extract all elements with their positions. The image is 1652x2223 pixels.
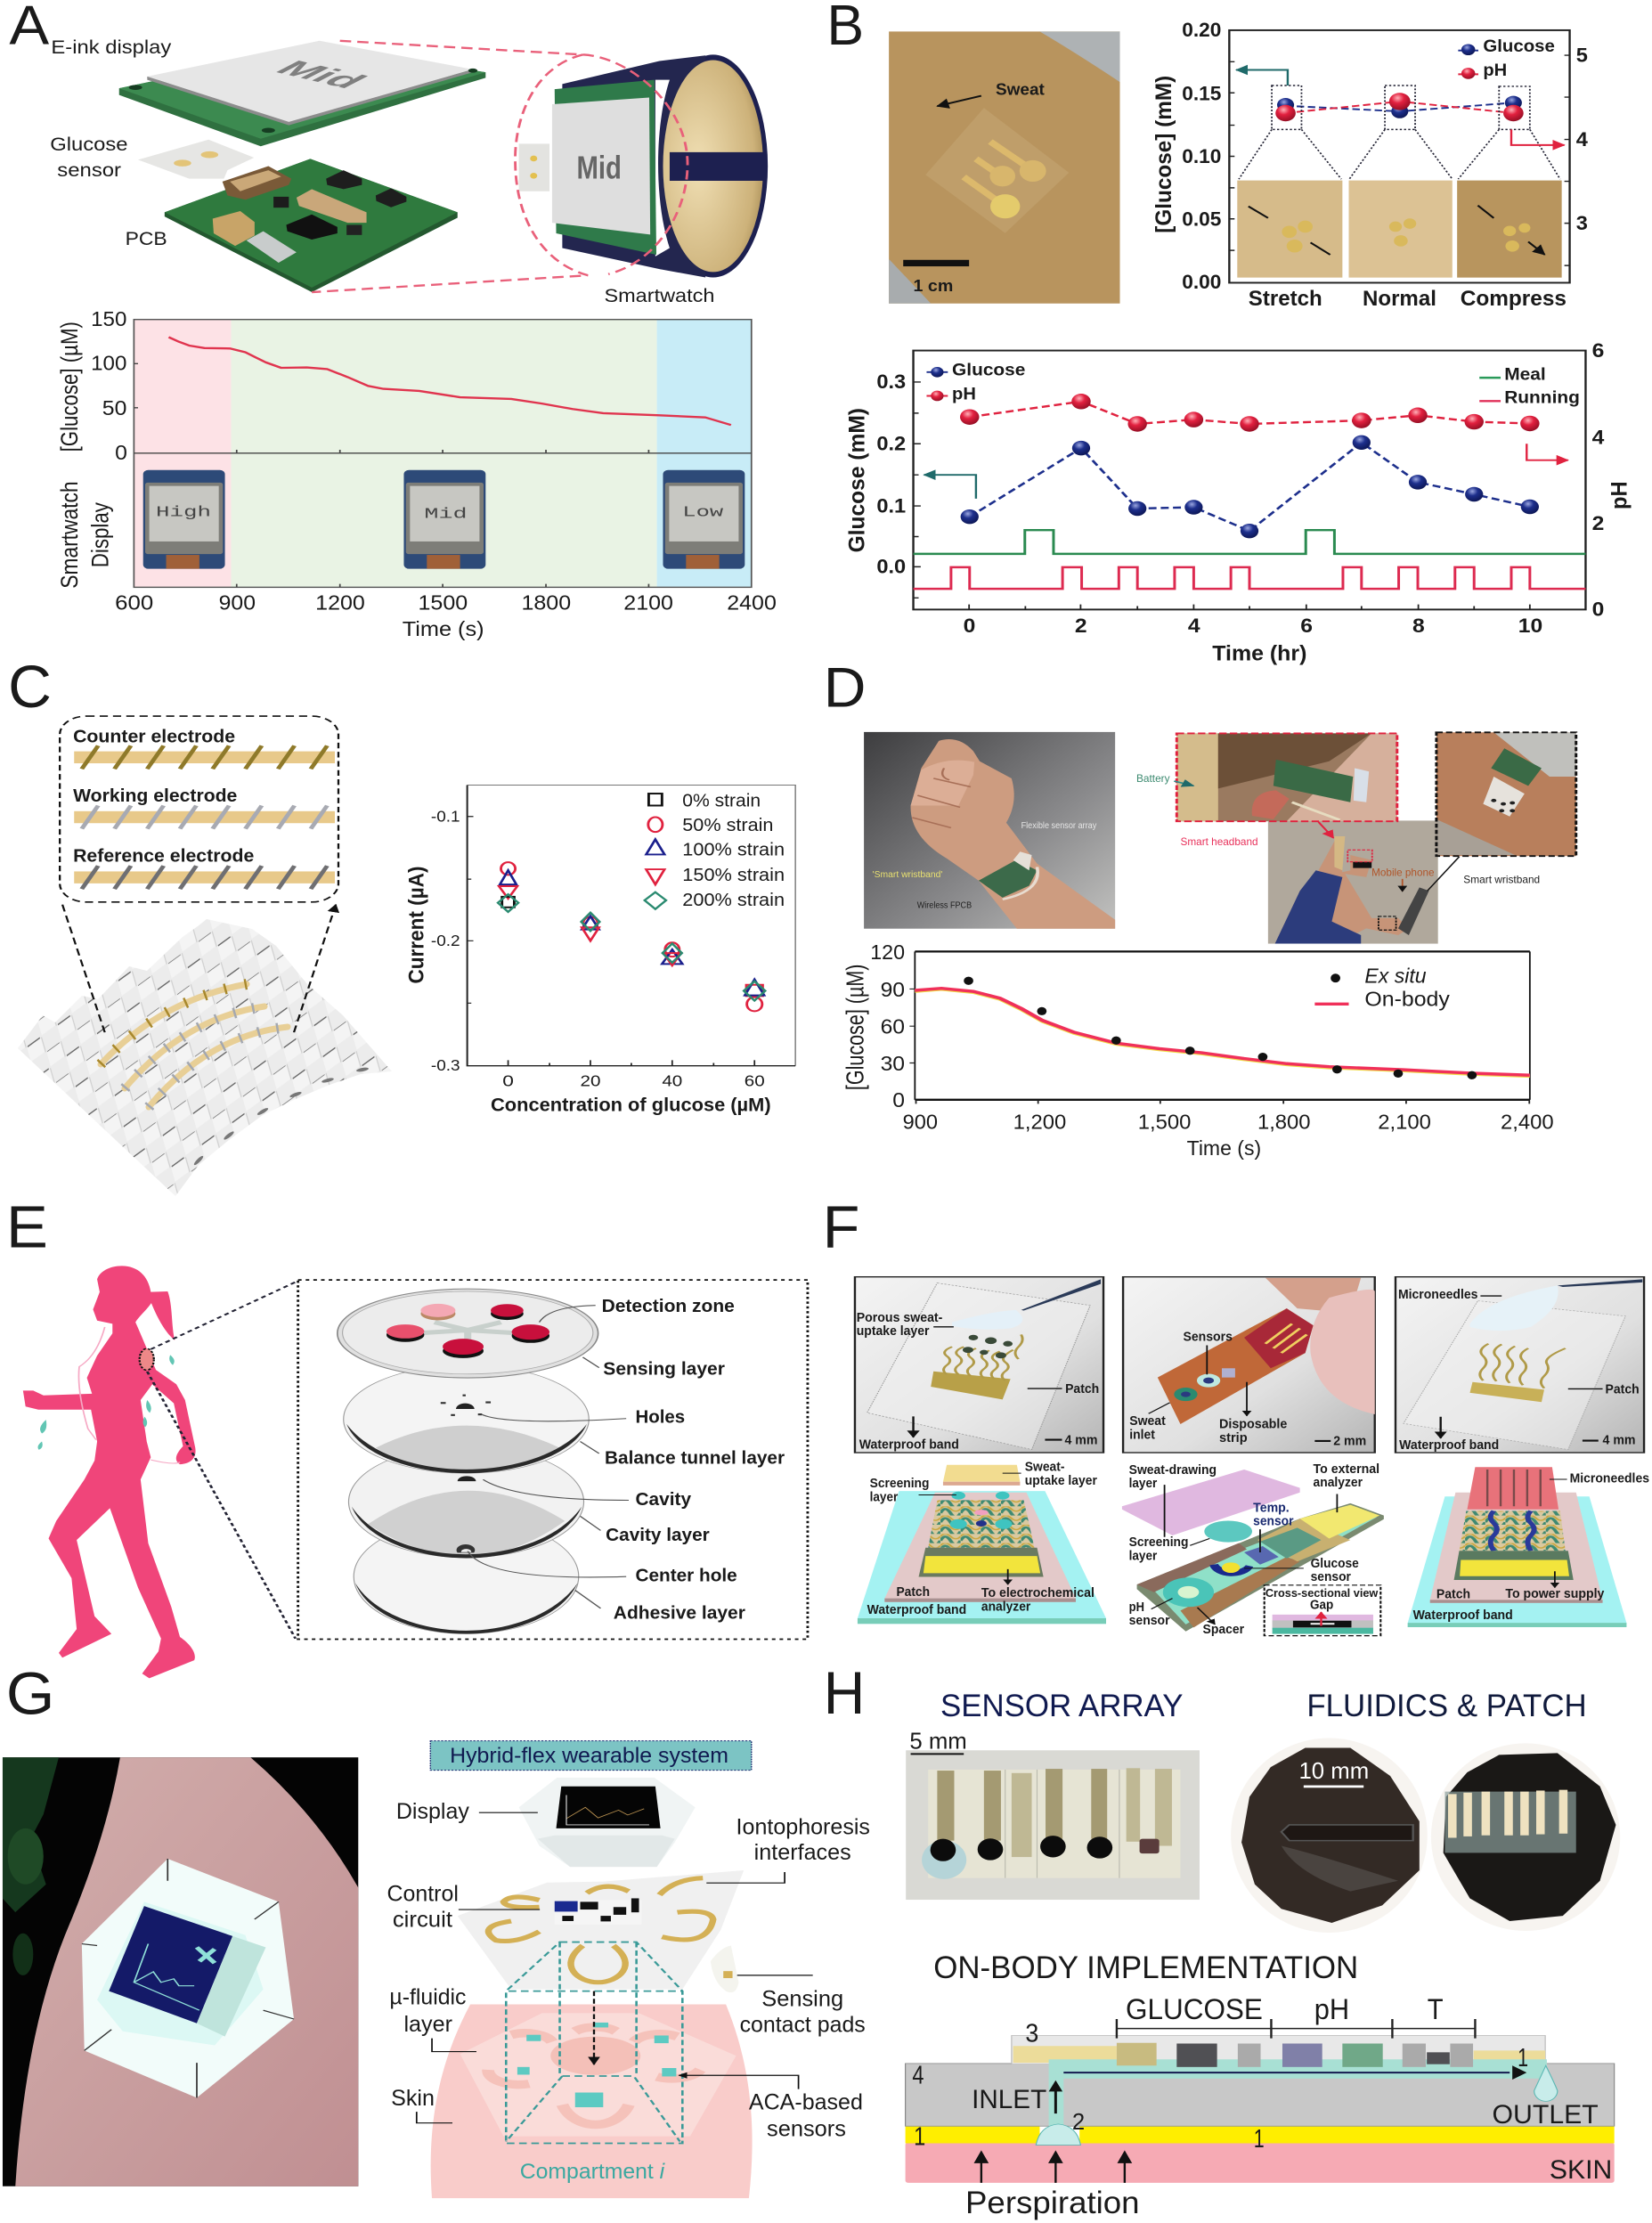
layer labels: Holes [635,1407,685,1427]
chart: glucose, pH, meals, running over time: Time (hr) [1212,640,1306,665]
diagram: disposable strip layers: Screening [1129,1535,1188,1550]
chart: glucose ex situ vs on-body: Time (s) [1187,1137,1261,1160]
photo: microneedle patch: Waterproof band [1399,1437,1499,1453]
chart: glucose, pH, meals, running over time: 2 [1592,513,1604,535]
sweat drops [1036,2124,1080,2145]
system labels: µ-fluidic [389,1984,466,2009]
e-ink module: High: High [156,503,211,521]
chart: current vs glucose concentration: 20 [580,1072,600,1090]
diagram labels: T [1428,1993,1444,2025]
photo: microneedle patch: Microneedles [1398,1287,1477,1302]
layer labels: Sensing layer [603,1359,725,1379]
bracket [1117,2019,1475,2039]
chart: glucose and pH under strain: [Glucose] (mM) [1151,76,1176,233]
diagram labels: 1 [1518,2043,1528,2072]
e-ink module: Low: Low [682,503,724,521]
panel B: sweat patch [826,0,1632,665]
chart: glucose and pH under strain: Glucose [1483,36,1555,56]
chart: glucose ex situ vs on-body: [Glucose] (µM) [841,965,868,1090]
diagram labels: 3 [1025,2019,1038,2048]
skin layer [906,2143,1615,2183]
chart: glucose, pH, meals, running over time: Glucose [952,360,1025,379]
layer labels [602,1296,785,1623]
photo: headband close-up [1136,733,1397,848]
chart: current vs glucose concentration: Current (µA) [404,866,428,984]
axis labels: [Glucose] (µM) [57,322,84,452]
diagram labels: 2 [1072,2109,1085,2135]
layer labels: Adhesive layer [614,1603,745,1623]
diagram: disposable strip layers: layer [1129,1475,1157,1490]
chart: glucose, pH, meals, running over time: pH [1606,481,1632,509]
cross-section inset [1265,1585,1380,1636]
chart: current vs glucose concentration: -0.2 [431,932,460,949]
e-ink module: Mid [403,470,485,569]
reference electrode: Reference electrode [73,846,254,866]
label: Smartwatch: Smartwatch [604,285,714,306]
system labels: Iontophoresis [736,1814,870,1839]
photo: disposable strip: inlet [1129,1427,1155,1442]
chart: glucose, pH, meals, running over time: 6 [1592,340,1604,362]
panel A: smartwatch display: sensor [57,159,121,182]
sensors on patch [1117,2043,1473,2067]
chart: glucose, pH, meals, running over time: Meal [1504,364,1546,384]
chart: glucose and pH under strain: 0.20 [1182,20,1221,42]
layer labels: Balance tunnel layer [605,1448,785,1468]
cavity layer [348,1446,584,1558]
axis labels: 1200 [315,592,365,615]
photo: microneedle patch [1396,1277,1644,1453]
axis labels: 1800 [521,592,571,615]
legend symbols [648,794,662,805]
chart: current vs glucose concentration: Concentration of glucose (µM) [491,1094,771,1115]
callout arrows [417,1812,813,2123]
panel E: colorimetric sweat patch [6,1194,808,1678]
chart: glucose and pH under strain: 3 [1576,213,1588,234]
chart: glucose ex situ vs on-body: 0 [892,1089,905,1112]
diagram labels: 1 [1254,2125,1265,2153]
dashed compartment outline [506,1942,682,2143]
skin layer: Compartment i [520,2159,665,2183]
photo: wristband close-up: Smart wristband [1463,874,1540,885]
diagram: disposable strip layers [1122,1462,1384,1637]
chart: glucose and pH under strain: 5 [1576,45,1588,67]
system labels: circuit [393,1907,452,1932]
photo: patch disc [1431,1743,1620,1931]
glucose sensor film [138,140,254,179]
earphone wires [78,1327,180,1463]
letter E: E [6,1194,48,1261]
photo: disposable strip: Sweat [1129,1413,1166,1429]
chart: glucose ex situ vs on-body: 2,100 [1378,1112,1431,1134]
balance tunnel layer [344,1365,589,1473]
diagram: disposable strip layers: sensor [1311,1569,1351,1584]
diagram labels: Perspiration [965,2185,1140,2220]
axis labels: Display [88,501,114,567]
chart: glucose and pH under strain: 0.10 [1182,146,1221,168]
axis labels: 1500 [419,592,468,615]
leader lines [468,1306,629,1608]
photo: porous layer patch: uptake layer [857,1323,929,1339]
photo: disposable strip: Disposable [1219,1416,1287,1431]
system labels: Display [396,1799,469,1823]
perspiration arrows [981,2162,1125,2183]
layer labels: Detection zone [602,1296,735,1315]
chart: glucose, pH, meals, running over time: Glucose (mM) [844,408,869,552]
chart: glucose and pH under strain: 0.00 [1182,272,1221,293]
chart: current vs glucose concentration: 0% strain [682,791,761,810]
photo: fluidics disc [1231,1738,1428,1933]
photo: porous layer patch: Porous sweat- [857,1310,942,1324]
axis labels: 100 [91,353,126,375]
photo: disposable strip: strip [1219,1430,1248,1445]
chart: glucose ex situ vs on-body: 900 [903,1112,938,1134]
photo: device on arm [3,1757,358,2186]
photo: wrist with sensor: 'Smart wristband' [873,869,942,879]
system labels: contact pads [740,2012,866,2037]
layer labels: Cavity [635,1489,691,1509]
diagram labels [912,1993,1612,2220]
diagram labels: OUTLET [1493,2100,1599,2129]
photo: porous layer patch: Waterproof band [859,1437,959,1452]
photo: headband close-up: Smart headband [1180,835,1258,848]
photo: disposable strip: 2 mm [1333,1433,1366,1448]
diagram: disposable strip layers: pH [1129,1600,1144,1615]
chart: glucose ex situ vs on-body: On-body [1364,989,1450,1011]
diagram: sweat-uptake patch [858,1459,1106,1624]
chart: glucose ex situ vs on-body: 1,500 [1138,1112,1191,1134]
chart: glucose, pH, meals, running over time: 0.2 [876,434,906,455]
diagram: disposable strip layers: To external [1314,1462,1379,1477]
adhesive layer [354,1519,579,1633]
dashed zoom arrows [62,905,336,1032]
detection zones [387,1304,549,1358]
panel C: stretchable fibre electrodes [8,653,795,1115]
E-ink display module [119,41,485,146]
chart: glucose ex situ vs on-body: 1,800 [1257,1112,1311,1134]
chart: current vs glucose concentration [404,786,795,1115]
diagram: microneedle patch: Patch [1436,1586,1470,1601]
diagram: disposable strip layers: sensor [1253,1513,1293,1528]
chart: glucose, pH, meals, running over time: 0 [1592,599,1604,621]
e-ink module: High [143,470,225,569]
panel H: sensor array and on-body implementation [824,1659,1620,2220]
skin layer [431,2005,753,2198]
diagram labels: SKIN [1550,2154,1612,2185]
working electrode: Working electrode [73,786,237,806]
system labels: sensors [767,2116,846,2141]
diagram: disposable strip layers: sensor [1129,1612,1170,1627]
axis labels: Time (s) [403,618,484,641]
chart: glucose ex situ vs on-body [841,941,1554,1160]
chart: glucose, pH, meals, running over time: 0.0 [876,557,906,578]
chart: glucose, pH, meals, running over time: 4 [1188,615,1200,637]
system labels [387,1799,870,2141]
heading: on-body implementation: ON-BODY IMPLEMENTATION [933,1950,1358,1985]
dashed zoom outline [312,41,688,292]
E-ink display module: Mid [266,56,377,93]
e-ink module: Low [663,470,745,569]
chart: current vs glucose concentration: -0.1 [431,808,460,826]
cross-section inset: Cross-sectional view [1265,1586,1379,1600]
chart: glucose ex situ vs on-body: 90 [881,979,905,1001]
axis labels: 2400 [727,592,777,615]
adhesive yellow layer [906,2127,1039,2143]
letter F: F [823,1193,859,1260]
electrode inset [60,716,338,902]
exploded layer diagram box [298,1280,808,1640]
chart: glucose, pH, meals, running over time: 0 [964,615,975,637]
microfluidic grey layer [906,2064,1615,2126]
letter D: D [824,656,866,719]
diagram: disposable strip layers: Sweat-drawing [1129,1462,1217,1478]
chart: glucose and pH under strain: 0.15 [1182,84,1221,105]
axis labels [57,308,777,641]
diagram: sweat-uptake patch: analyzer [981,1599,1030,1614]
central dashed arrow [592,1991,596,2064]
chart: current vs glucose concentration: 150% strain [682,865,785,885]
layer labels: Center hole [635,1566,737,1585]
cross-section inset: Gap [1310,1598,1333,1612]
chart: glucose and pH under strain [1151,20,1588,311]
photo: disposable strip: Sensors [1183,1329,1233,1344]
system labels: Sensing [761,1986,843,2011]
diagram labels: pH [1314,1993,1349,2025]
sensor cap layer [1012,2035,1545,2064]
photo: sensor strips [906,1729,1200,1900]
label: E-ink display: E-ink display [51,37,171,58]
diagram: disposable strip layers: Glucose [1311,1556,1359,1571]
system labels: interfaces [754,1840,851,1865]
chart: current vs glucose concentration: 0 [502,1072,514,1090]
data markers [498,862,765,1011]
photo: athlete on cycle [1268,820,1460,944]
panel G: hybrid-flex wearable system [3,1660,870,2198]
chart: current vs glucose concentration: 60 [745,1072,765,1090]
axis labels: 150 [91,308,126,330]
chart: glucose ex situ vs on-body: Ex situ [1364,965,1427,988]
heading: sensor array: SENSOR ARRAY [940,1688,1183,1723]
chart: current vs glucose concentration: 50% strain [682,815,773,835]
photo: wrist with sensor: Wireless FPCB [917,900,972,910]
layer labels: Cavity layer [606,1525,710,1544]
chart: glucose and pH under strain: pH [1483,60,1507,79]
chart: glucose ex situ vs on-body: 120 [870,941,905,964]
photo: headband close-up: Battery [1136,772,1170,785]
label: Glucose sensor: Glucose [50,134,128,155]
chart: glucose and pH under strain: Compress [1461,286,1567,311]
letter C: C [8,653,52,721]
chart: glucose, pH, meals, running over time: 10 [1518,615,1542,637]
diagram labels: GLUCOSE [1126,1993,1263,2025]
axis labels: 2100 [623,592,673,615]
diagram labels: 4 [912,2061,924,2089]
glucose curve [168,338,731,425]
smartwatch illustration: Mid [576,151,622,186]
diagram: disposable strip layers: layer [1129,1548,1157,1563]
flow arrow [1063,2071,1510,2075]
e-ink module: Mid: Mid [424,505,468,523]
sweat drops [37,1355,175,1450]
axis labels: 600 [115,592,153,615]
textile with three fibre electrodes [18,919,392,1196]
photo: fluidics disc: 10 mm [1298,1759,1369,1784]
panel D: smart wristband and headband [824,656,1576,1160]
diagram: sweat-uptake patch: uptake layer [1025,1473,1097,1488]
photo: patch on skin: Sweat [996,81,1045,99]
photo: patch on skin: 1 cm [914,277,953,296]
panel F: epidermal patches [823,1193,1649,1637]
diagram: sweat-uptake patch: Patch [896,1584,930,1599]
diagram: microneedle patch: Waterproof band [1413,1608,1513,1623]
diagram labels: INLET [972,2085,1046,2114]
chart: current vs glucose concentration: 200% strain [682,890,785,910]
chart: glucose, pH, meals, running over time: 4 [1592,428,1605,449]
chart: glucose ex situ vs on-body: 2,400 [1501,1112,1554,1134]
photo: athlete on cycle: Mobile phone [1371,867,1435,878]
photo: wristband close-up [1436,732,1576,885]
axis labels: 900 [219,592,256,615]
chart: glucose and pH under strain: Stretch [1249,286,1322,311]
cross-section diagram [906,1993,1615,2220]
chart: glucose, pH, meals, running over time: 2 [1075,615,1087,637]
photo: wrist with sensor [864,732,1115,929]
chart: glucose, pH, meals, running over time: Running [1504,387,1580,407]
control circuit layer [458,1870,744,1992]
chart: glucose, pH, meals, running over time: 0.1 [876,496,906,517]
diagram: disposable strip layers: analyzer [1314,1474,1363,1489]
diagram labels: 1 [914,2122,925,2151]
axis labels: 50 [102,397,126,419]
chart: glucose ex situ vs on-body: 60 [881,1016,905,1038]
chart: glucose and pH under strain: 4 [1576,129,1588,151]
system labels: ACA-based [749,2089,863,2114]
system labels: Skin [391,2086,435,2111]
photo: porous layer patch: 4 mm [1064,1432,1097,1447]
smartwatch illustration [519,54,768,278]
photo: disposable strip [1123,1277,1375,1453]
label: PCB: PCB [126,228,167,250]
diagram: disposable strip layers: Spacer [1203,1622,1244,1637]
photo: sensor strips: 5 mm [909,1729,967,1755]
system header: Hybrid-flex wearable system [450,1743,728,1768]
chart: glucose ex situ vs on-body: 1,200 [1013,1112,1066,1134]
runner silhouette [23,1266,196,1678]
photo: porous layer patch [855,1277,1103,1453]
axis labels: 0 [115,442,127,464]
counter electrode: Counter electrode [73,727,235,747]
letter G: G [6,1660,54,1727]
system labels: Control [387,1881,459,1906]
chart: current vs glucose concentration: -0.3 [431,1056,460,1074]
letter H: H [824,1659,865,1727]
chart: glucose, pH, meals, running over time: 6 [1300,615,1313,637]
photo: patch on skin [889,31,1120,304]
diagram: sweat-uptake patch: Waterproof band [867,1601,966,1616]
chart: current vs glucose concentration: 100% strain [682,840,785,859]
PCB board with components [165,159,458,292]
system labels: layer [403,2011,452,2036]
diagram: sweat-uptake patch: To electrochemical [981,1584,1095,1600]
display module [519,1778,696,1867]
dotted zoom lines [147,1281,298,1639]
chart: glucose ex situ vs on-body: 30 [881,1053,905,1075]
system header [430,1741,752,1771]
channel [1049,2059,1547,2128]
photo: porous layer patch: Patch [1065,1380,1099,1396]
chart: glucose, pH, meals, running over time [844,340,1632,665]
chart: glucose, pH, meals, running over time: 8 [1412,615,1425,637]
diagram: microneedle patch [1408,1467,1649,1627]
glucose and smartwatch display chart [57,308,777,641]
diagram: disposable strip layers: Temp. [1253,1500,1290,1515]
inset photos [1237,181,1342,278]
chart: glucose and pH under strain: Normal [1363,286,1436,311]
diagram: sweat-uptake patch: Screening [870,1475,929,1490]
chart: glucose, pH, meals, running over time: 0.3 [876,371,906,394]
chart: glucose and pH under strain: 0.05 [1182,209,1221,231]
diagram: sweat-uptake patch: Sweat- [1025,1459,1064,1474]
panel A: smartwatch display [9,0,777,641]
diagram: sweat-uptake patch: layer [870,1489,898,1504]
photo: wrist with sensor: Flexible sensor array [1021,820,1096,830]
chart: glucose, pH, meals, running over time: pH [952,384,976,403]
chart: current vs glucose concentration: 40 [662,1072,682,1090]
axis labels: Smartwatch [57,481,84,589]
sensing layer [338,1289,598,1378]
